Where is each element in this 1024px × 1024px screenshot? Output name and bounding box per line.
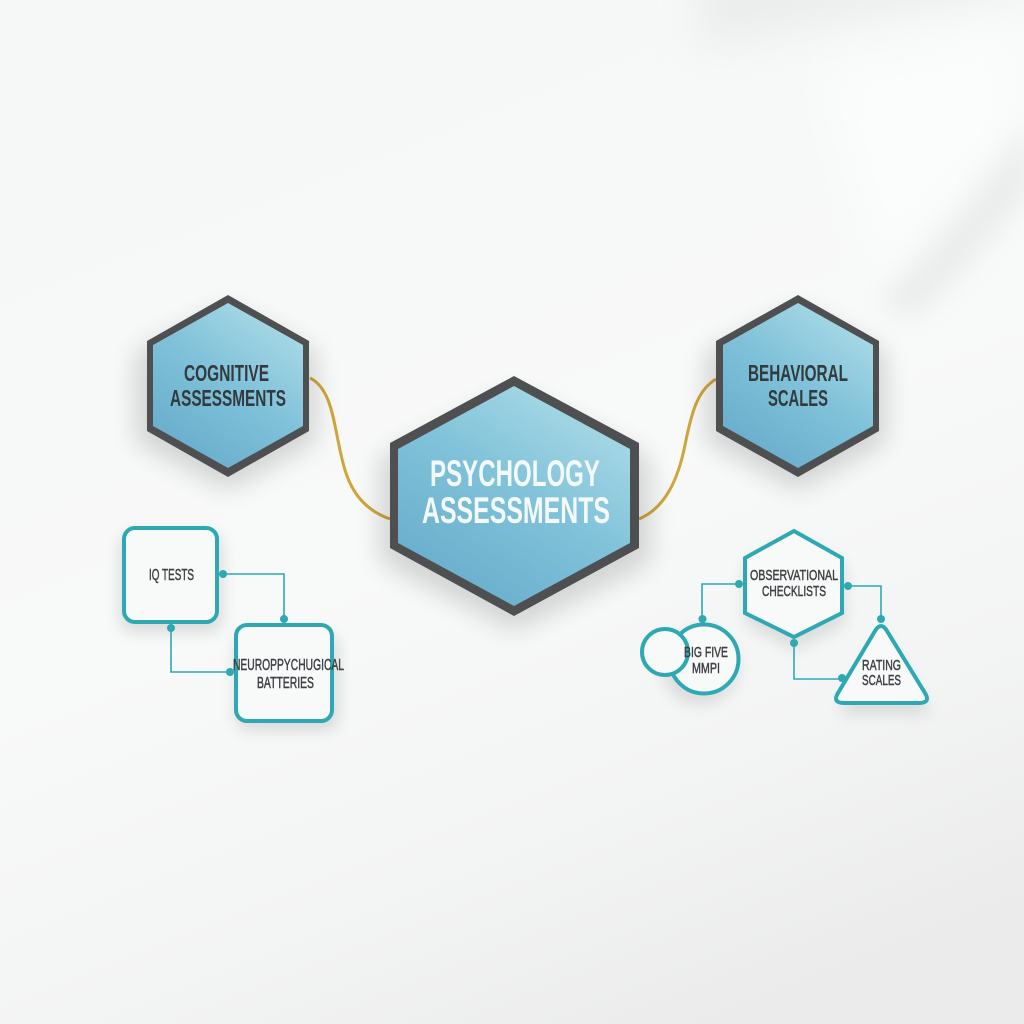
connector: cognitive to centre	[310, 378, 390, 519]
cluster: cognitive tests	[120, 528, 344, 730]
shape: Observational Checklists: OBSERVATIONAL	[750, 567, 838, 584]
card: IQ Tests	[120, 528, 222, 632]
card: Neuropsychological Batteries: NEUROPPYCHUGICAL	[233, 657, 344, 674]
connector: checklists to triangle, right	[844, 582, 885, 623]
label line 2: SCALES	[768, 385, 828, 411]
label: BEHAVIORAL	[748, 360, 848, 386]
connector: behavioral to centre	[639, 379, 716, 519]
cluster: behavioral tools	[642, 531, 932, 714]
connector: checklists to circles	[698, 580, 743, 623]
heading line 1: PSYCHOLOGY	[430, 453, 600, 494]
shape: Observational Checklists	[745, 531, 845, 650]
connector: checklists to triangle, lower	[790, 639, 846, 682]
connector: IQ to batteries, upper	[219, 570, 288, 623]
card: Neuropsychological Batteries: BATTERIES	[257, 675, 314, 692]
shape: Rating Scales triangle	[836, 626, 932, 714]
shape: Big Five and MMPI circles: BIG FIVE	[684, 644, 728, 661]
hexagon: Cognitive Assessments	[136, 295, 316, 490]
hexagon: Behavioral Scales	[706, 295, 886, 490]
shape: Rating Scales triangle: SCALES	[862, 672, 901, 689]
label: COGNITIVE	[184, 360, 269, 386]
card: Neuropsychological Batteries	[233, 625, 344, 730]
shape: Observational Checklists: CHECKLISTS	[762, 583, 826, 600]
shape: Big Five and MMPI circles: MMPI	[692, 660, 720, 677]
connector: IQ to batteries, lower	[167, 624, 234, 676]
card: IQ Tests: IQ TESTS	[149, 567, 194, 584]
shape: Big Five and MMPI circles	[642, 624, 738, 705]
heading line 2: ASSESSMENTS	[422, 490, 610, 531]
shape: Rating Scales triangle: RATING	[862, 657, 901, 674]
central hexagon: Psychology Assessments	[380, 376, 650, 630]
label line 2: ASSESSMENTS	[170, 385, 286, 411]
